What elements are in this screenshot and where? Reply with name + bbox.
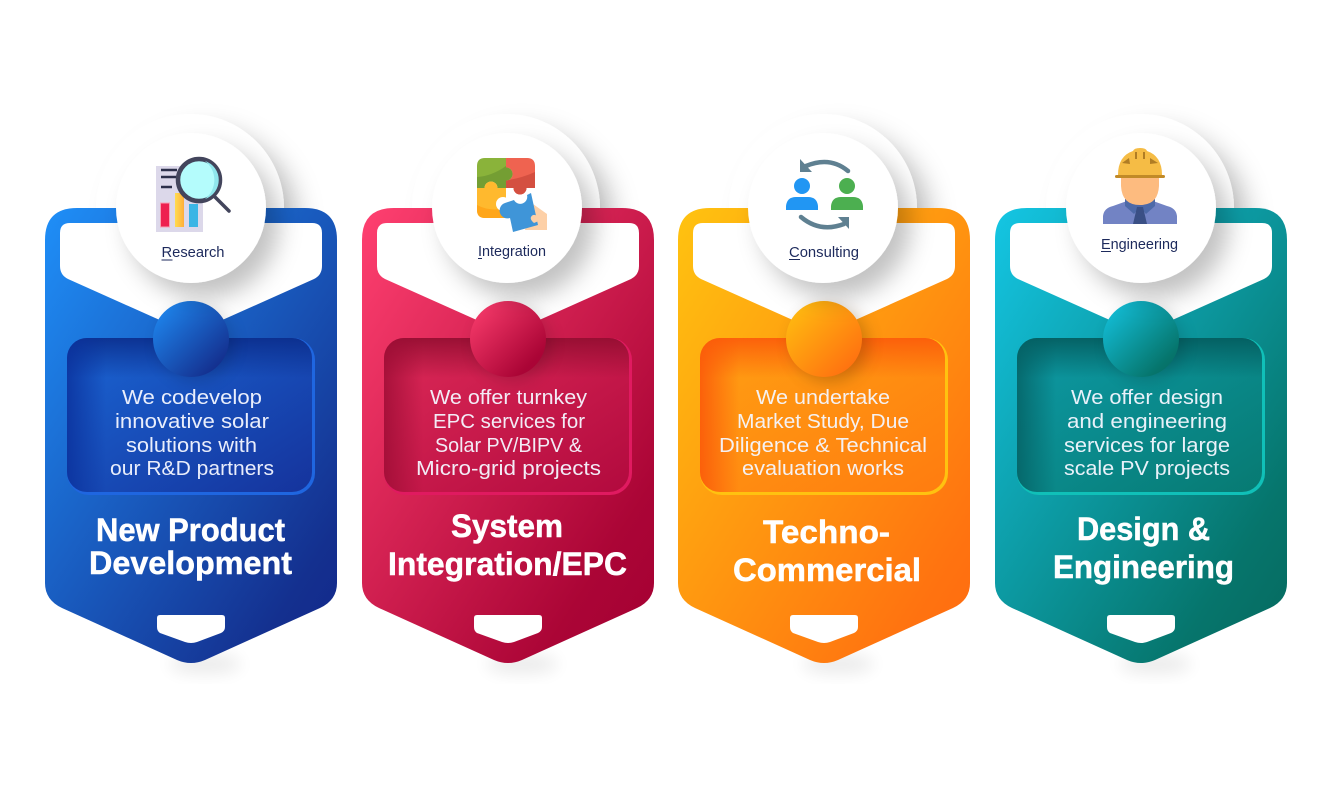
description text: solutions with bbox=[126, 435, 257, 457]
description text: We offer turnkey bbox=[430, 387, 587, 409]
icon circle bbox=[116, 133, 266, 283]
bottom notch bbox=[474, 615, 542, 643]
ball shadow bbox=[792, 306, 868, 382]
card title: Design & bbox=[1077, 511, 1210, 547]
tip shadow bbox=[169, 654, 241, 674]
ball shadow bbox=[1108, 306, 1184, 382]
ball bbox=[786, 301, 862, 377]
icon: two people and cycle arrows bbox=[786, 159, 863, 229]
card: Design & Engineering bbox=[995, 114, 1287, 674]
icon: engineer with hard hat bbox=[1103, 148, 1177, 224]
description text: EPC services for bbox=[433, 411, 585, 433]
card: Techno-Commercial bbox=[678, 114, 970, 674]
card title: Integration/EPC bbox=[388, 546, 627, 582]
bottom notch bbox=[157, 615, 225, 643]
white header cut-out bbox=[377, 223, 639, 334]
icon label: Engineering bbox=[1101, 236, 1178, 253]
ball shadow bbox=[158, 306, 234, 382]
description panel bbox=[1017, 338, 1265, 495]
white header cut-out bbox=[693, 223, 955, 334]
description text: scale PV projects bbox=[1064, 458, 1230, 480]
card: System Integration/EPC bbox=[362, 114, 654, 674]
white header cut-out bbox=[1010, 223, 1272, 334]
white header cut-out bbox=[60, 223, 322, 334]
description panel bbox=[67, 338, 315, 495]
description text bbox=[416, 387, 601, 480]
description text: evaluation works bbox=[742, 458, 904, 480]
card title bbox=[1053, 511, 1234, 585]
badge body bbox=[362, 208, 654, 663]
bottom notch bbox=[1107, 615, 1175, 643]
description text bbox=[110, 387, 274, 480]
card title: Techno- bbox=[763, 514, 890, 550]
description text: Market Study, Due bbox=[737, 411, 909, 433]
description text: and engineering bbox=[1067, 411, 1227, 433]
icon label: Research bbox=[162, 244, 224, 261]
card title: Engineering bbox=[1053, 549, 1234, 585]
card title bbox=[89, 512, 292, 581]
icon: puzzle pieces and hand bbox=[477, 158, 547, 232]
card title: New Product bbox=[96, 512, 285, 548]
tip shadow bbox=[802, 654, 874, 674]
description text: We codevelop bbox=[122, 387, 262, 409]
card title: Commercial bbox=[733, 552, 921, 588]
card: New Product Development bbox=[45, 114, 337, 674]
description text: We offer design bbox=[1071, 387, 1223, 409]
badge body bbox=[678, 208, 970, 663]
card title: Development bbox=[89, 545, 292, 581]
icon label: Integration bbox=[478, 243, 546, 260]
ball bbox=[1103, 301, 1179, 377]
card title bbox=[388, 508, 627, 582]
card title: System bbox=[451, 508, 563, 544]
description text: Micro-grid projects bbox=[416, 458, 601, 480]
badge body bbox=[995, 208, 1287, 663]
description text: Solar PV/BIPV & bbox=[435, 435, 583, 457]
description text: our R&D partners bbox=[110, 458, 274, 480]
card title bbox=[733, 514, 921, 588]
tip shadow bbox=[486, 654, 558, 674]
description panel bbox=[384, 338, 632, 495]
description text: innovative solar bbox=[115, 411, 269, 433]
description text: services for large bbox=[1064, 435, 1230, 457]
description text: Diligence & Technical bbox=[719, 435, 927, 457]
ball bbox=[470, 301, 546, 377]
description text: We undertake bbox=[756, 387, 890, 409]
tip shadow bbox=[1119, 654, 1191, 674]
back halo circle bbox=[96, 114, 284, 302]
icon label: Consulting bbox=[789, 244, 859, 261]
ball bbox=[153, 301, 229, 377]
bottom notch bbox=[790, 615, 858, 643]
icon circle bbox=[432, 133, 582, 283]
description panel bbox=[700, 338, 948, 495]
icon: research chart and magnifier bbox=[156, 159, 229, 232]
ball shadow bbox=[475, 306, 551, 382]
badge body bbox=[45, 208, 337, 663]
back halo circle bbox=[729, 114, 917, 302]
description text bbox=[719, 387, 927, 480]
description text bbox=[1064, 387, 1230, 480]
icon circle bbox=[1066, 133, 1216, 283]
icon circle bbox=[748, 133, 898, 283]
back halo circle bbox=[1046, 114, 1234, 302]
back halo circle bbox=[412, 114, 600, 302]
